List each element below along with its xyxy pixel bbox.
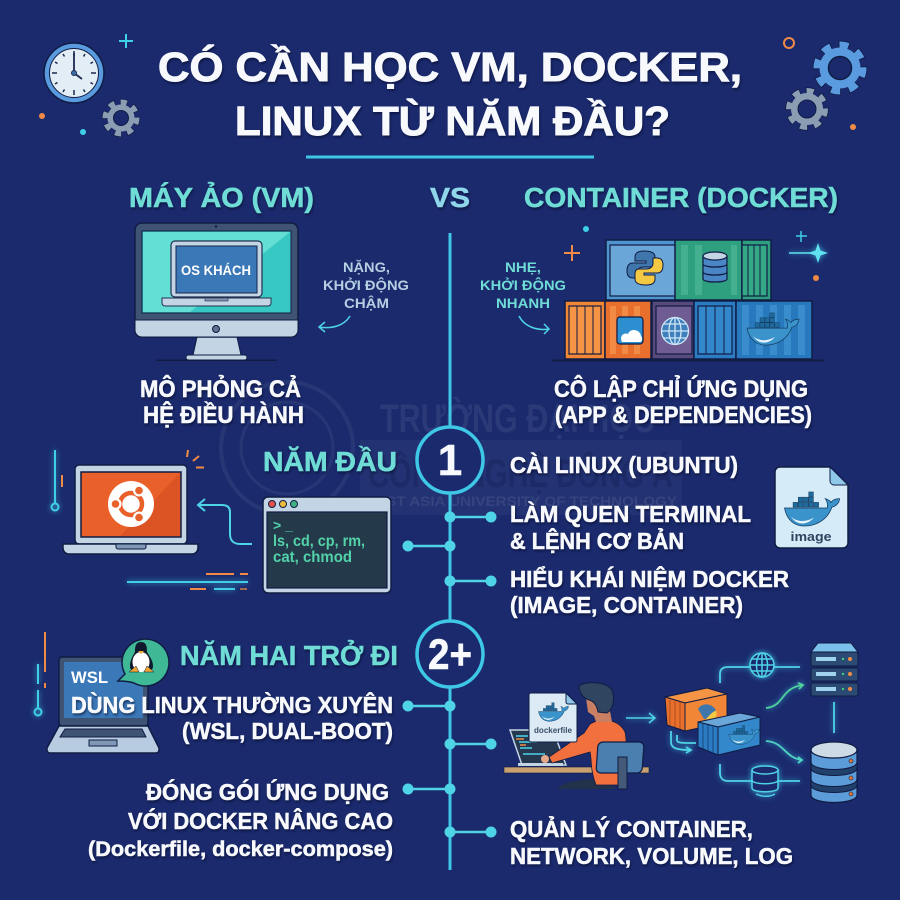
callout: light, fast boot: KHỞI ĐỘNG: [480, 276, 566, 293]
arrow: terminal to laptop: [198, 499, 252, 544]
container: orange plain: [565, 301, 605, 359]
icon: dockerfile document: dockerfile: [534, 725, 572, 735]
list: second year left items: (WSL, DUAL-BOOT): [182, 718, 393, 744]
title underline: [306, 156, 594, 158]
list: second year left items: ĐÓNG GÓI ỨNG DỤNG: [146, 778, 389, 805]
icon: terminal window: [263, 497, 391, 593]
list: second year left items: (Dockerfile, docker-compose): [88, 838, 393, 861]
title: [158, 44, 742, 144]
terminal text: > _: [273, 517, 293, 533]
text: container description: [554, 374, 812, 429]
icon: VM desktop monitor: [135, 223, 298, 361]
container: python: [606, 240, 676, 300]
timeline axis with branches: [402, 233, 496, 870]
decor: orange dot: [850, 124, 856, 130]
heading: first year: NĂM ĐẦU: [263, 446, 397, 477]
list: manage containers: QUẢN LÝ CONTAINER,: [510, 814, 753, 842]
container: purple globe: [652, 301, 694, 359]
list: first year items: [510, 451, 789, 618]
decor: top-right orange ring: [784, 38, 794, 48]
icon: Ubuntu laptop: [63, 465, 198, 554]
laptop: [510, 730, 566, 766]
network and storage flow lines: [671, 667, 834, 781]
container: docker whale: [736, 301, 812, 359]
list: first year items: HIỂU KHÁI NIỆM DOCKER: [510, 565, 789, 592]
title: CÓ CẦN HỌC VM, DOCKER,: [158, 44, 742, 90]
container: blue plain: [694, 301, 736, 359]
terminal text: ls, cd, cp, rm,: [273, 533, 365, 550]
container: orange cloud: [605, 301, 651, 359]
icon: WSL laptop: [47, 657, 159, 753]
callout: heavy, slow boot: NẶNG,: [343, 259, 390, 275]
heading: second year onward: NĂM HAI TRỞ ĐI: [180, 639, 398, 671]
heading: Container: CONTAINER (DOCKER): [524, 182, 838, 213]
decor: left glow ticks: [34, 632, 45, 716]
list: second year left items: VỚI DOCKER NÂNG CAO: [128, 807, 393, 834]
list: manage containers: NETWORK, VOLUME, LOG: [510, 843, 793, 869]
watermark: university seal and name: TRƯỜNG ĐẠI HỌC: [380, 395, 655, 441]
icon: database: [811, 742, 857, 802]
decor: top-left sparks: [39, 34, 133, 135]
container: small green: [742, 240, 771, 300]
icon: orange and blue containers: [665, 688, 760, 755]
decor: glow dashes: [127, 574, 248, 589]
icon: dockerfile document: [529, 693, 577, 742]
callout: heavy, slow boot: [319, 259, 409, 332]
watermark: university seal and name: [221, 382, 682, 515]
terminal text: [273, 517, 365, 566]
decor: sparkles around containers: [564, 226, 828, 281]
terminal text: cat, chmod: [273, 549, 352, 566]
illustration: developer at desk: [504, 683, 649, 789]
list: second year left items: [71, 691, 393, 861]
badge: year 2+: [417, 621, 483, 687]
watermark: university seal and name: EAST ASIA UNIVERSITY OF TECHNOLOGY: [365, 493, 678, 509]
text: VM description: HỆ ĐIỀU HÀNH: [143, 401, 304, 429]
list: manage containers: [510, 814, 793, 869]
watermark: university seal and name: CÔNG NGHỆ ĐÔNG Á: [368, 450, 673, 496]
badge: year 1: 1: [438, 436, 462, 485]
callout: light, fast boot: NHANH: [496, 295, 550, 311]
icon: grey gear left: [106, 102, 136, 134]
heading: VM: MÁY ẢO (VM): [129, 181, 314, 213]
icon: small volume: [752, 766, 778, 796]
icon: grey gear right: [789, 91, 825, 127]
list: first year items: (IMAGE, CONTAINER): [510, 592, 743, 618]
icon: docker image file: [775, 467, 848, 548]
list: first year items: LÀM QUEN TERMINAL: [510, 500, 751, 527]
callout: heavy, slow boot: CHẬM: [344, 294, 389, 311]
badge: year 1: [417, 427, 483, 493]
Ubuntu logo: [108, 481, 154, 527]
container: database: [675, 240, 742, 300]
list: first year items: CÀI LINUX (UBUNTU): [510, 451, 738, 478]
icon: Linux penguin bubble: [118, 639, 169, 686]
text: VM description: [140, 374, 304, 429]
arrow: developer to containers: [626, 713, 655, 723]
text: container description: (APP & DEPENDENCIES): [555, 402, 812, 429]
list: first year items: & LỆNH CƠ BẢN: [510, 526, 684, 554]
icon: blue gear right: [817, 45, 863, 91]
callout: light, fast boot: [480, 259, 566, 334]
icon: server rack: [811, 643, 858, 696]
text: container description: CÔ LẬP CHỈ ỨNG DỤNG: [554, 374, 808, 403]
badge: year 2+: 2+: [428, 631, 472, 679]
monitor label: OS KHÁCH: [181, 263, 251, 278]
list: second year left items: DÙNG LINUX THƯỜNG XUYÊN: [71, 691, 393, 718]
icon: container stack: [552, 240, 824, 362]
icon: globe network: [750, 653, 774, 677]
icon: clock: [44, 43, 104, 103]
callout: light, fast boot: NHẸ,: [505, 259, 541, 275]
heading: VS: VS: [430, 182, 470, 213]
decor: laptop sparks: [52, 450, 204, 510]
title: LINUX TỪ NĂM ĐẦU?: [235, 98, 670, 144]
icon: docker image file: image: [790, 529, 832, 544]
callout: heavy, slow boot: KHỞI ĐỘNG: [323, 276, 409, 293]
WSL label: WSL: [71, 668, 108, 687]
text: VM description: MÔ PHỎNG CẢ: [140, 374, 301, 403]
